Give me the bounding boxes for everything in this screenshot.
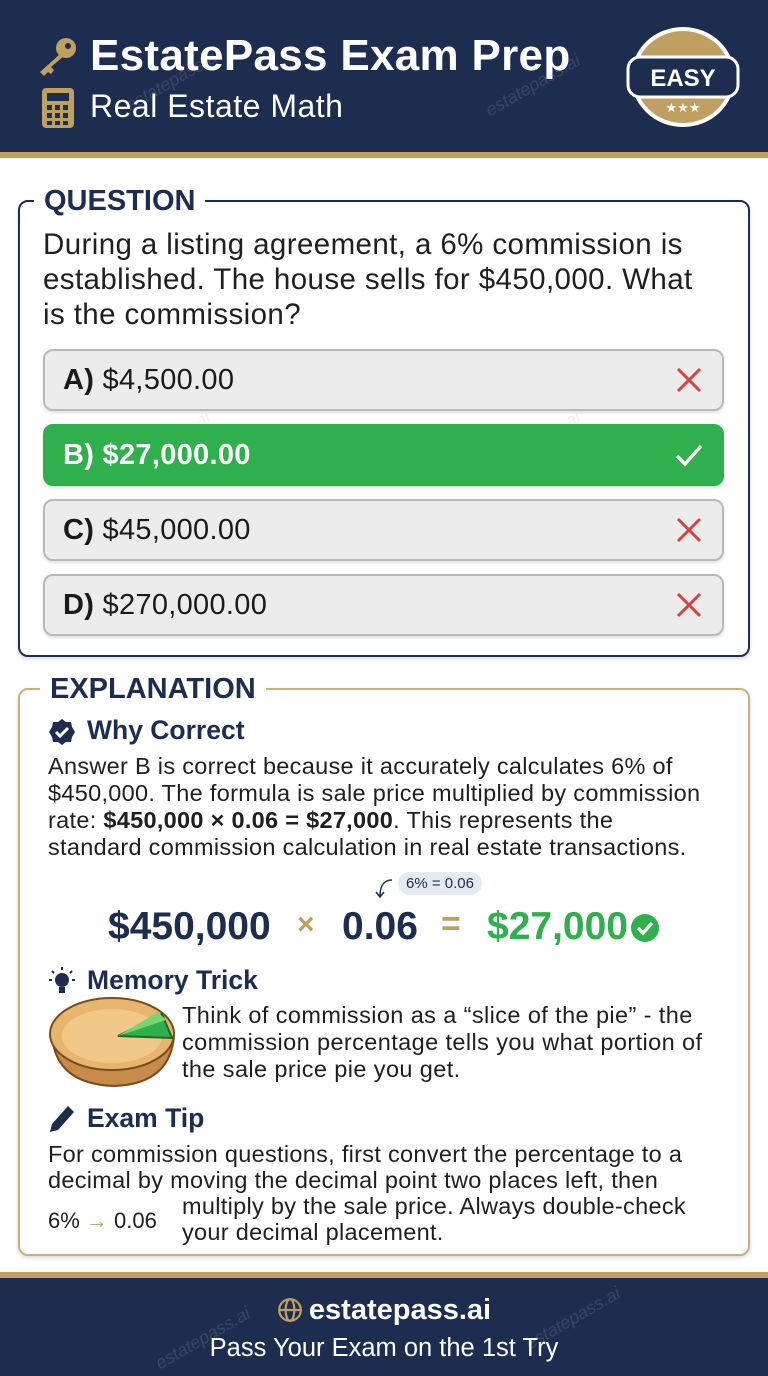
callout: 6% to 0.06: 6% → 0.06 — [48, 1208, 157, 1233]
header: estatepass.ai — [122, 45, 224, 115]
formula: $450,000 — [108, 905, 271, 948]
text: multiply by the sale price. Always double-check — [182, 1193, 686, 1219]
panel: question — [18, 200, 750, 657]
question text — [43, 228, 693, 331]
option A — [43, 349, 724, 411]
heading: memory trick: Memory Trick — [87, 965, 258, 995]
icon: pie — [49, 997, 176, 1087]
text: your decimal placement. — [182, 1219, 444, 1245]
text: why correct: standard commission calculation in real estate transactions. — [48, 834, 686, 860]
icon: verified badge — [49, 719, 75, 745]
question text: During a listing agreement, a 6% commission is — [43, 228, 683, 261]
option D: D) $270,000.00 — [63, 589, 267, 621]
text: why correct: Answer B is correct because it accurately calculates 6% of — [48, 753, 673, 779]
footer — [0, 1272, 768, 1376]
badge: easy: ★★★ — [666, 100, 700, 115]
question text: established. The house sells for $450,000. What — [43, 263, 693, 296]
header — [0, 0, 768, 158]
footer: estatepass.ai — [152, 1303, 254, 1373]
icon: lightbulb — [49, 967, 75, 993]
formula: 0.06 — [342, 905, 418, 948]
formula: = — [441, 905, 461, 943]
callout: 6% = 0.06: 6% = 0.06 — [406, 875, 474, 892]
heading: explanation: EXPLANATION — [50, 673, 256, 705]
panel: question: estatepass.ai — [482, 407, 584, 477]
panel: question: estatepass.ai — [112, 407, 214, 477]
text: why correct — [48, 753, 700, 860]
badge: easy — [626, 27, 740, 127]
text: memory trick: the sale price pie you get. — [182, 1056, 461, 1082]
icon: pencil — [50, 1106, 74, 1132]
text: exam tip: For commission questions, first convert the percentage to a — [48, 1141, 682, 1167]
badge: easy: EASY — [650, 65, 716, 92]
option D — [43, 574, 724, 636]
text: why correct: rate: $450,000 × 0.06 = $27,000. This represents the — [48, 807, 613, 833]
formula: $27,000 — [487, 905, 628, 948]
option C — [43, 499, 724, 561]
option B correct: B) $27,000.00 — [63, 439, 251, 471]
option A: A) $4,500.00 — [63, 364, 234, 396]
text: memory trick — [182, 1002, 702, 1082]
panel: explanation — [18, 688, 750, 1256]
callout: 6% = 0.06 — [376, 872, 482, 898]
question text: is the commission? — [43, 298, 301, 331]
formula — [108, 905, 659, 948]
subtitle: Real Estate Math — [90, 88, 343, 124]
title: EstatePass Exam Prep — [90, 31, 571, 80]
text: exam tip: decimal by moving the decimal point two places left, then — [48, 1167, 658, 1193]
text: memory trick: Think of commission as a “slice of the pie” - the — [182, 1002, 693, 1028]
heading: exam tip: Exam Tip — [87, 1103, 204, 1133]
option B correct — [43, 424, 724, 486]
icon: calculator — [42, 88, 74, 128]
option C: C) $45,000.00 — [63, 514, 251, 546]
header: estatepass.ai — [482, 50, 584, 120]
text: why correct: $450,000. The formula is sale price multiplied by commission — [48, 780, 700, 806]
footer: tagline: Pass Your Exam on the 1st Try — [210, 1334, 558, 1362]
text: memory trick: commission percentage tells you what portion of — [182, 1029, 702, 1055]
heading: question: QUESTION — [44, 185, 195, 217]
heading: why correct: Why Correct — [87, 715, 245, 745]
text: exam tip — [48, 1141, 682, 1193]
footer: url: estatepass.ai — [309, 1294, 491, 1326]
icon: key — [40, 38, 76, 76]
footer: estatepass.ai — [522, 1283, 624, 1353]
formula: × — [297, 908, 315, 941]
